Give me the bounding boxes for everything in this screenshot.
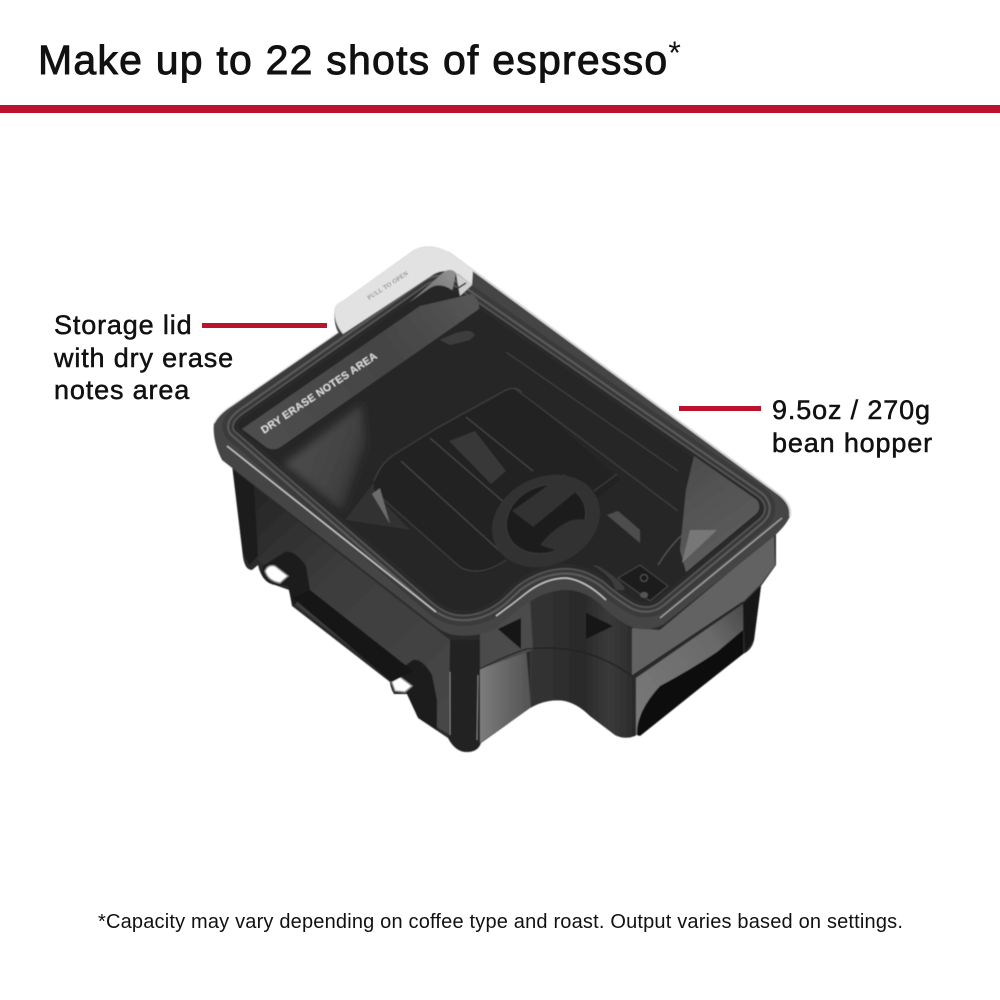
title: Make up to 22 shots of espresso* (38, 35, 682, 83)
callout text: storage lid (54, 310, 234, 405)
left light wedge (284, 405, 365, 510)
pull tab (335, 246, 473, 336)
lid rim (214, 246, 790, 636)
recessed base channel (293, 590, 413, 682)
callout text: bean hopper: 9.5oz / 270g (772, 395, 931, 425)
strip text: DRY ERASE NOTES AREA (259, 350, 380, 436)
callout text: storage lid: with dry erase (54, 342, 234, 372)
callout: storage lid (54, 310, 327, 405)
body front-right face (636, 604, 743, 735)
right light band (680, 456, 759, 572)
inner mechanism (592, 511, 700, 601)
callout leader line: storage lid (202, 323, 327, 328)
callout text: bean hopper (772, 395, 933, 458)
hopper tray (345, 352, 678, 573)
callout text: storage lid: Storage lid (54, 310, 192, 340)
body centre column (530, 590, 636, 738)
callout text: storage lid: notes area (54, 375, 190, 405)
lid window (238, 285, 760, 611)
dial handle (512, 474, 583, 527)
left mounting clip (262, 552, 310, 606)
red header rule (0, 105, 1000, 113)
selector dial (477, 457, 615, 585)
right mounting clip (390, 660, 437, 730)
notch reflections (498, 618, 521, 649)
callout text: bean hopper: bean hopper (772, 428, 933, 458)
footnote: *Capacity may vary depending on coffee type and roast. Output varies based on settings. (98, 911, 903, 933)
dark opening in body (637, 630, 743, 736)
tab text: PULL TO OPEN (366, 270, 410, 302)
callout: bean hopper (679, 395, 933, 458)
body front-left face (480, 649, 531, 743)
dry erase strip (242, 294, 479, 449)
callout leader line: bean hopper (679, 406, 761, 411)
hopper body (232, 460, 776, 752)
